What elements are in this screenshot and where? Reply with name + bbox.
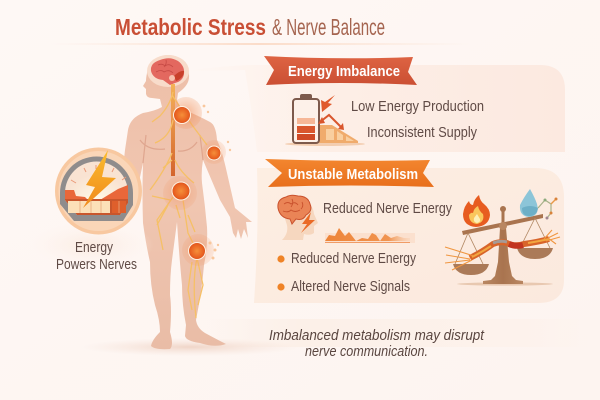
caption band and text: Imbalanced metabolism may disrupt <box>269 327 485 344</box>
scale beam <box>462 214 543 235</box>
human figure with nerves <box>120 55 252 349</box>
brain <box>147 55 189 87</box>
lightning bolt <box>83 150 116 208</box>
nerve hotspots <box>170 97 202 129</box>
ribbon: Energy Imbalance: Energy Imbalance <box>288 64 400 80</box>
ribbon: Unstable Metabolism: Unstable Metabolism <box>288 167 418 183</box>
icon: water drop <box>520 189 538 217</box>
floor shadow <box>80 338 300 356</box>
body silhouette <box>120 55 252 349</box>
scale pans <box>455 218 550 264</box>
gauge label: Energy <box>75 239 113 256</box>
caption band and text <box>205 319 600 360</box>
nerve branches <box>150 92 207 318</box>
gauge halo <box>55 148 142 234</box>
gauge bars <box>65 199 128 215</box>
gauge face <box>65 162 128 215</box>
signal waveform <box>325 228 415 243</box>
caption band and text: nerve communication. <box>305 343 428 360</box>
text: Low Energy Production: Low Energy Production <box>351 98 484 115</box>
gauge caption shadow <box>30 221 154 269</box>
icon: balance scale with flame, water drop and nerve <box>445 189 560 286</box>
title: Metabolic Stress <box>115 14 266 40</box>
title <box>115 14 385 40</box>
ribbon: Unstable Metabolism <box>265 159 434 187</box>
gauge label: Powers Nerves <box>56 256 137 273</box>
panel: unstable metabolism <box>254 159 564 303</box>
spinal cord <box>171 84 175 176</box>
icon: flame <box>463 195 490 227</box>
scale post and base <box>483 228 523 284</box>
gauge ticks <box>71 165 126 183</box>
text: Inconsistent Supply: Inconsistent Supply <box>367 124 477 141</box>
sparks <box>203 105 231 259</box>
title: & Nerve Balance <box>272 14 385 40</box>
gauge orange hills <box>65 185 128 200</box>
icon: low battery with falling arrows <box>285 94 365 146</box>
bullet: Altered Nerve Signals: Altered Nerve Signals <box>291 278 410 295</box>
icon: head with brain and bolt <box>278 195 318 240</box>
gauge label <box>56 239 137 273</box>
gauge frame <box>60 156 133 221</box>
nerve bundle <box>470 239 549 258</box>
ribbon: Energy Imbalance <box>264 56 417 85</box>
molecule <box>538 200 551 218</box>
text: Reduced Nerve Energy heading: Reduced Nerve Energy <box>323 200 452 217</box>
bullet: Reduced Nerve Energy: Reduced Nerve Energy <box>291 250 416 267</box>
gauge: energy powers nerves <box>30 148 154 273</box>
panel: energy imbalance <box>185 56 565 152</box>
